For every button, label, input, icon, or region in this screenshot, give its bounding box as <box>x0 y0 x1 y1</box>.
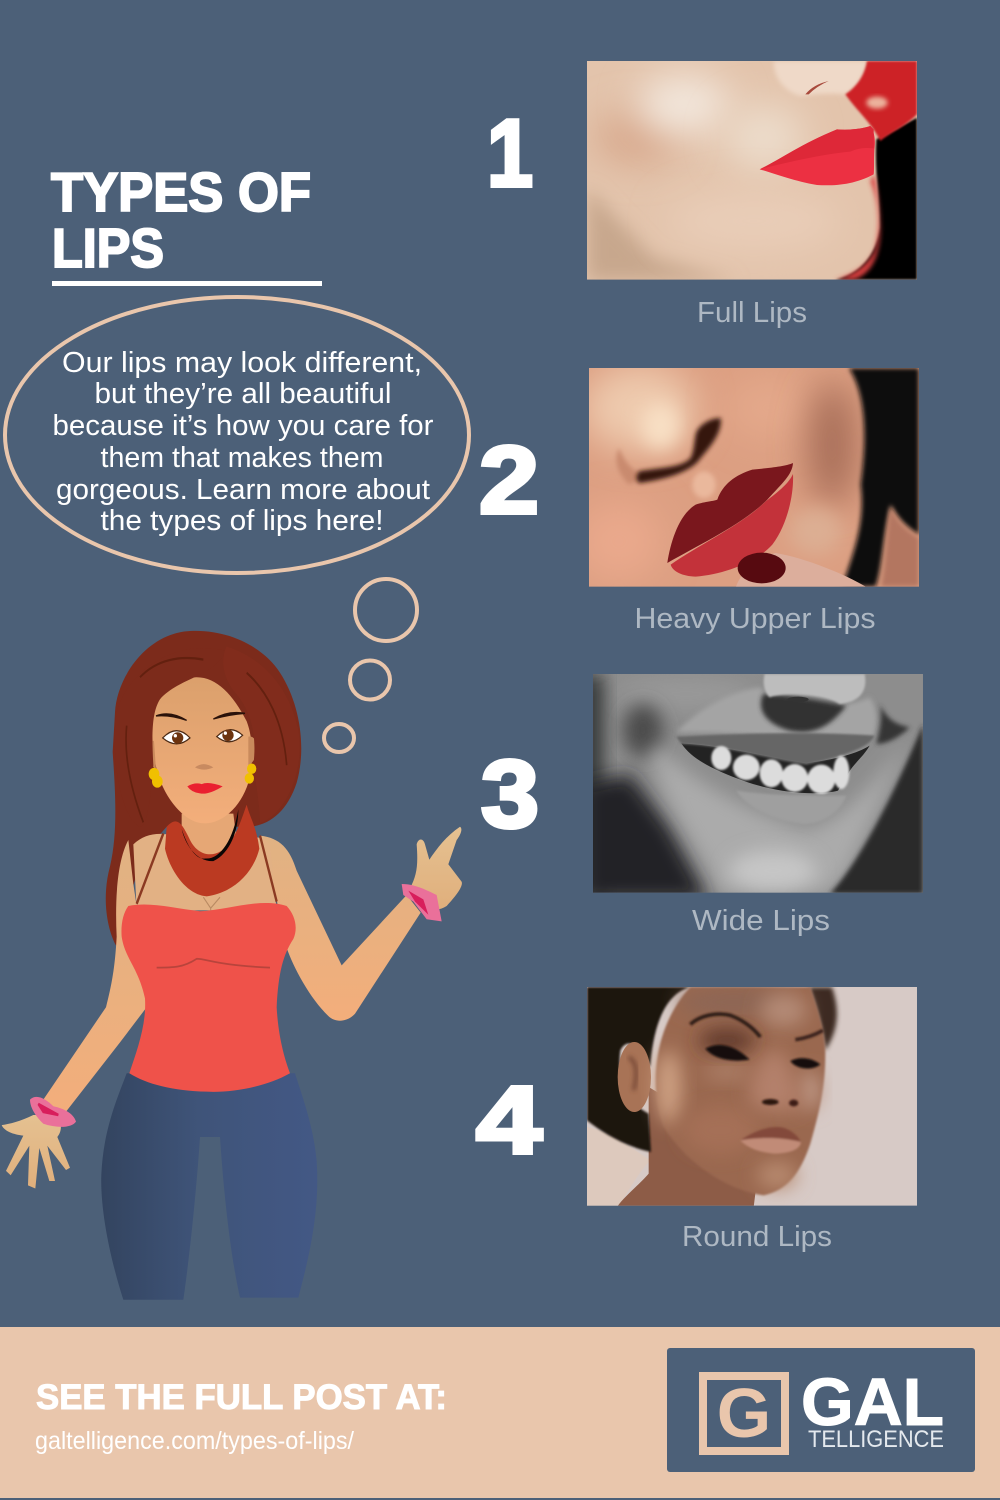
nose <box>195 764 213 770</box>
numbers: 2 <box>479 427 539 534</box>
title: LIPS <box>52 217 164 279</box>
eyebrows <box>156 712 245 720</box>
mouth <box>187 783 223 794</box>
top <box>121 903 296 1092</box>
footer call to action: SEE THE FULL POST AT: <box>36 1378 447 1417</box>
footer link: galtelligence.com/types-of-lips/ <box>35 1427 354 1455</box>
speech bubble <box>5 297 469 573</box>
necklace <box>203 897 220 924</box>
caption: round lips: Round Lips <box>682 1221 832 1253</box>
right scrunchie <box>402 884 442 921</box>
numbers: 1 <box>487 100 533 207</box>
photo: wide lips <box>580 674 923 901</box>
speech bubble: gorgeous. Learn more about <box>56 474 430 506</box>
logo: GAL <box>801 1365 944 1440</box>
neck <box>182 814 237 862</box>
title: TYPES OF <box>51 161 311 223</box>
photo: full lips <box>587 61 917 281</box>
speech bubble: Our lips may look different, <box>62 347 422 379</box>
speech bubble: because it’s how you care for <box>52 410 434 442</box>
numbers: 3 <box>481 741 539 848</box>
photo: heavy upper lips <box>576 365 919 588</box>
speech bubble: but they’re all beautiful <box>94 378 392 410</box>
left hand <box>2 1115 70 1188</box>
logo: TELLIGENCE <box>808 1426 944 1453</box>
numbers <box>476 100 542 1174</box>
eyes <box>163 731 190 744</box>
logo: G <box>717 1374 771 1452</box>
footer band <box>0 1327 1000 1498</box>
thought bubbles <box>324 579 417 752</box>
face <box>152 677 252 823</box>
caption: heavy upper lips: Heavy Upper Lips <box>634 603 876 635</box>
earrings <box>149 763 256 788</box>
numbers: 4 <box>476 1067 542 1174</box>
photo: round lips <box>587 987 917 1207</box>
trousers <box>101 1073 317 1300</box>
title <box>51 161 322 286</box>
right arm <box>260 836 421 1021</box>
speech bubble: them that makes them <box>100 442 384 474</box>
scarf <box>165 805 259 896</box>
hair back <box>106 631 301 946</box>
speech bubble: the types of lips here! <box>100 505 384 537</box>
hair front <box>115 648 227 827</box>
left arm <box>43 840 147 1117</box>
right hand <box>410 827 462 909</box>
caption: wide lips: Wide Lips <box>692 905 830 937</box>
illustration: woman <box>2 631 462 1300</box>
torso top <box>133 834 277 910</box>
caption: full lips: Full Lips <box>697 297 807 329</box>
straps <box>137 833 277 904</box>
logo <box>667 1348 975 1472</box>
left scrunchie <box>30 1097 76 1127</box>
